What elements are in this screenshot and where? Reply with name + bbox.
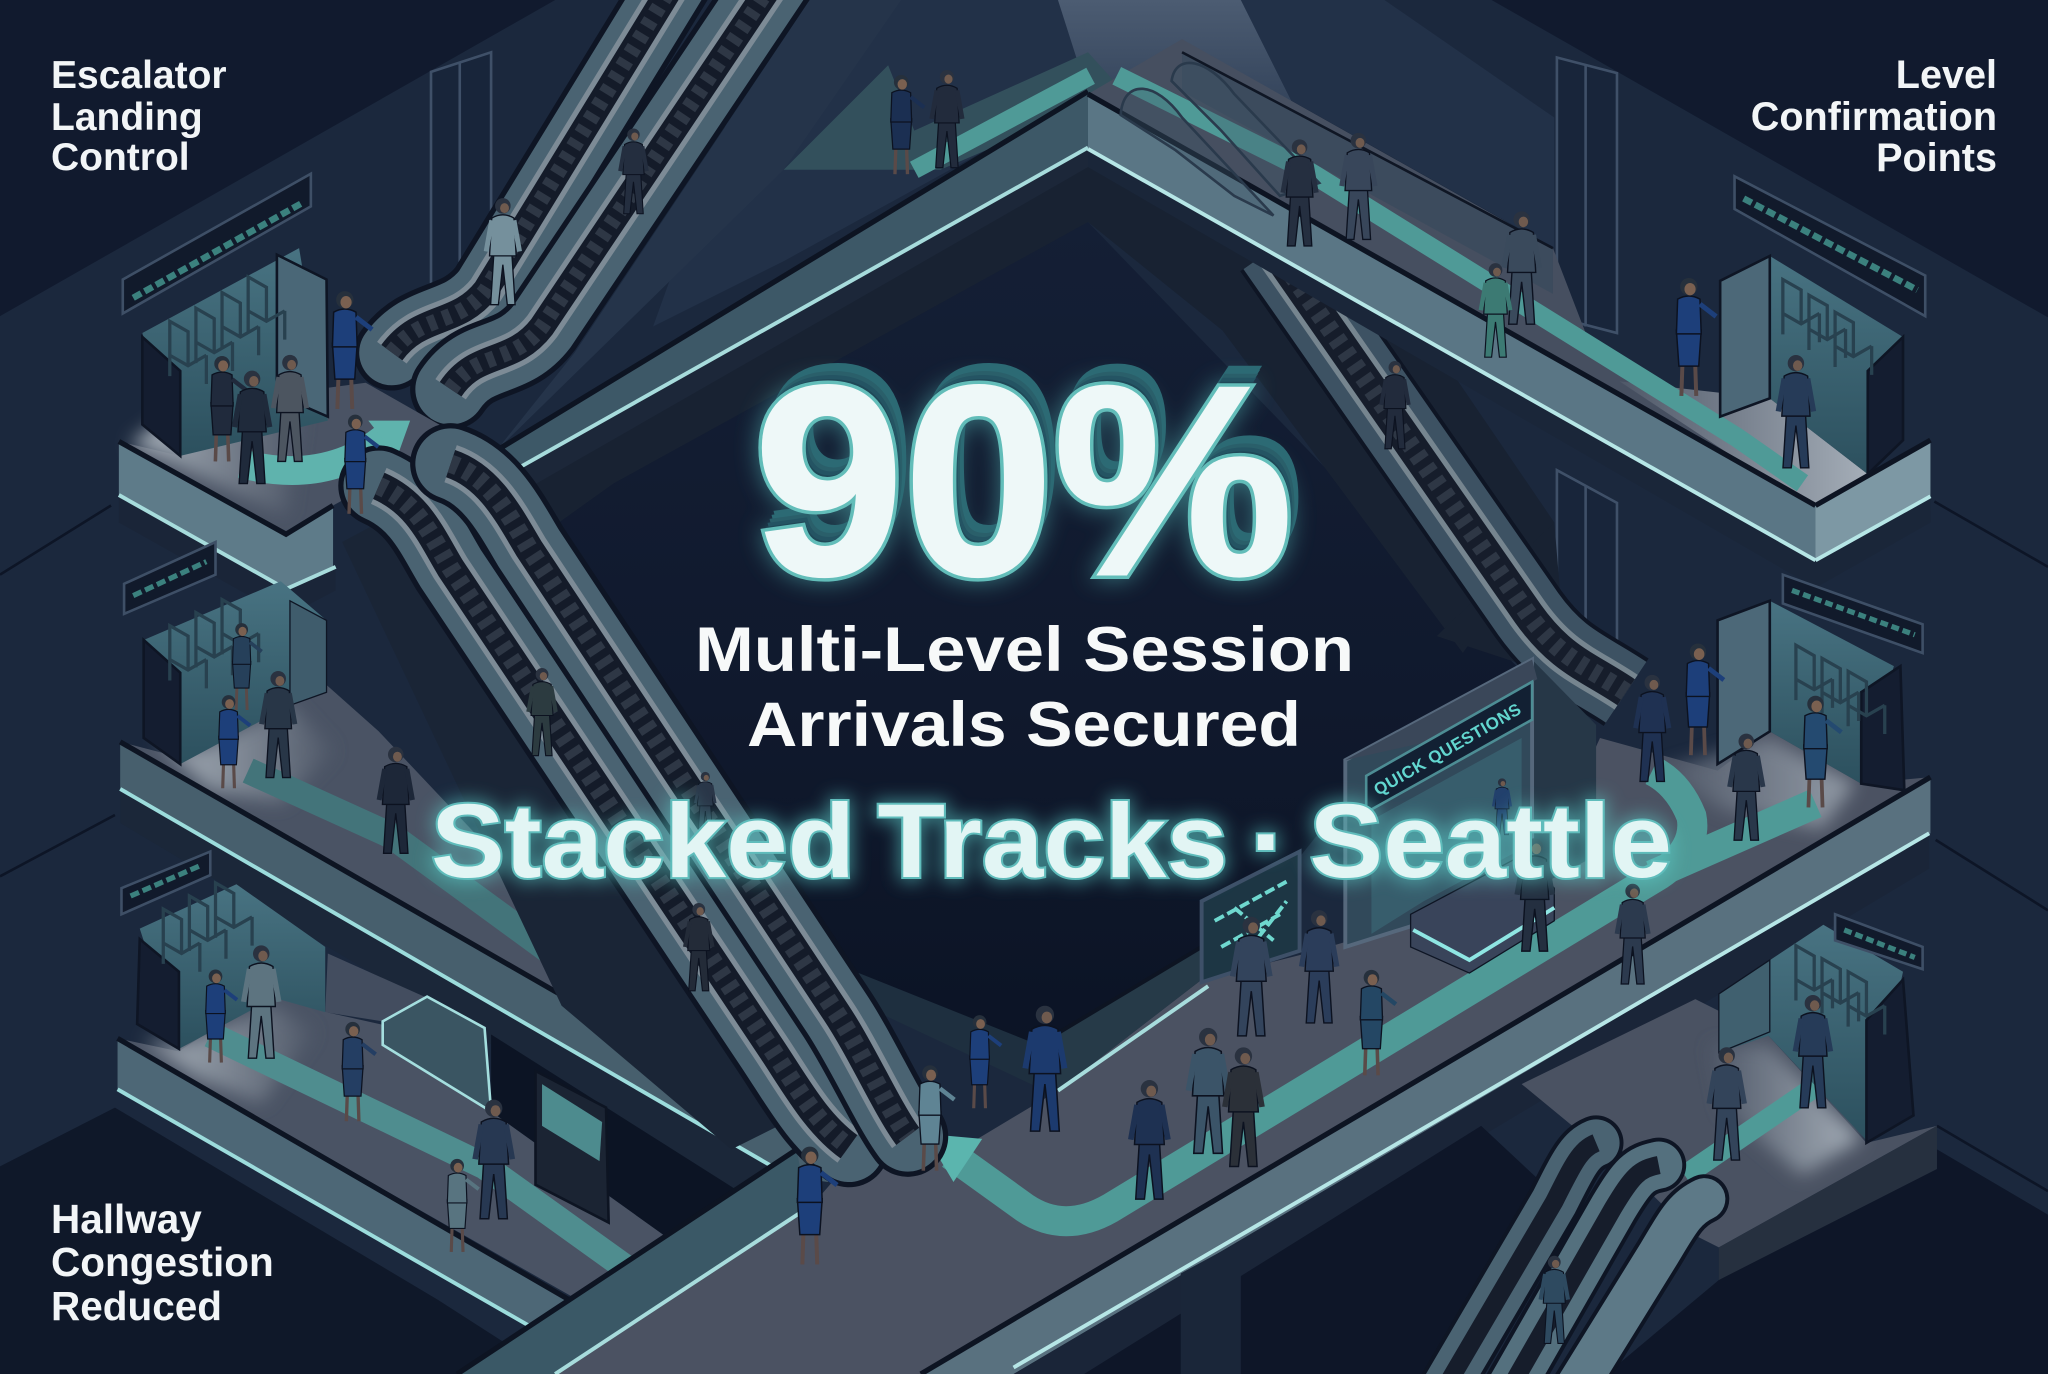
wall structural lines bbox=[0, 502, 2048, 1191]
main lower walkway bbox=[457, 731, 1930, 1374]
subtitle: Arrivals Secured bbox=[747, 690, 1301, 760]
headline stat: 90%: 90% bbox=[754, 331, 1293, 632]
corner label: hallway congestion reduced: Reduced bbox=[51, 1283, 222, 1329]
headline stat: 90%: 90% bbox=[754, 331, 1293, 632]
top shaft wall bbox=[496, 0, 901, 451]
subtitle bbox=[695, 615, 1354, 760]
corner label: level confirmation points: Confirmation bbox=[1751, 95, 1997, 139]
back glass rails of walkway bbox=[810, 947, 1208, 1091]
headline stat: 90%: 90% bbox=[764, 311, 1303, 612]
people bbox=[206, 70, 1841, 1343]
bottom left dark area bbox=[0, 1108, 529, 1374]
booth sign text: QUICK QUESTIONS bbox=[1370, 699, 1525, 799]
columns bbox=[431, 52, 1617, 653]
center-right escalator bbox=[1273, 248, 1626, 692]
event title: Stacked Tracks · Seattle bbox=[431, 783, 1672, 900]
walkway direction arrow bbox=[925, 1134, 982, 1182]
under-bridge wedges bbox=[503, 163, 1567, 679]
corner label: hallway congestion reduced: Congestion bbox=[51, 1239, 274, 1285]
room: middle left bbox=[124, 542, 327, 764]
top escalators bbox=[392, 0, 778, 389]
void behind lower left corridor bbox=[491, 1034, 765, 1243]
headline stat: 90%: 90% bbox=[754, 331, 1293, 632]
corner label: level confirmation points: Level bbox=[1896, 53, 1997, 97]
bottom dark voids bbox=[1084, 1126, 2048, 1374]
center void bbox=[509, 222, 1554, 1091]
room: top right bbox=[1720, 176, 1925, 474]
headline stat: 90%: 90% bbox=[760, 319, 1299, 620]
lower left floor bbox=[118, 953, 675, 1345]
bottom right escalators bbox=[1443, 1143, 1704, 1374]
teal arrow on landing bbox=[242, 436, 387, 471]
headline stat: 90%: 90% bbox=[756, 327, 1295, 628]
event title: Stacked Tracks · Seattle bbox=[431, 783, 1672, 900]
directory kiosk sign bbox=[536, 1071, 609, 1223]
headline stat: 90%: 90% bbox=[762, 315, 1301, 616]
room: top left bbox=[119, 174, 460, 616]
middle left floor bbox=[120, 679, 828, 1208]
top right bridge bbox=[1088, 39, 1930, 588]
corner label: escalator landing control: Escalator bbox=[51, 54, 227, 97]
room: lower right bbox=[1719, 914, 1923, 1143]
top-right escalator upper loops bbox=[1121, 63, 1319, 216]
room: middle right bbox=[1718, 575, 1923, 790]
corner label: escalator landing control: Landing bbox=[51, 96, 203, 139]
quick questions booth bbox=[1345, 660, 1596, 973]
corner label: hallway congestion reduced: Hallway bbox=[51, 1196, 202, 1242]
headline stat: 90%: 90% bbox=[758, 323, 1297, 624]
dark ceiling corners bbox=[0, 0, 2048, 317]
room: lower left bbox=[121, 852, 325, 1049]
bottom right floor bbox=[1522, 999, 1937, 1280]
corner label: level confirmation points: Points bbox=[1876, 136, 1997, 180]
interactive display board bbox=[1202, 852, 1300, 982]
corner label: escalator landing control: Control bbox=[51, 136, 190, 179]
top light beam backdrop bbox=[653, 0, 1554, 327]
big left escalators bbox=[342, 464, 908, 1149]
subtitle: Multi-Level Session bbox=[695, 615, 1354, 685]
top left bridge bbox=[496, 52, 1123, 503]
column below walkway bbox=[1181, 1241, 1241, 1374]
